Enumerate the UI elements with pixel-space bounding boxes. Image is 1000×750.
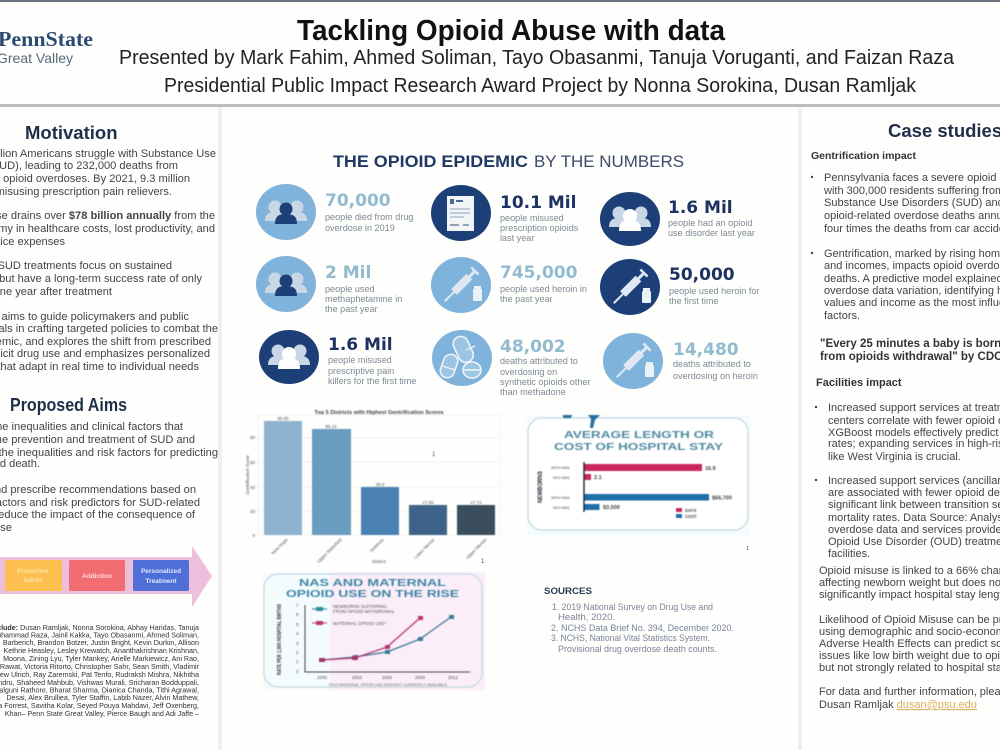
text block: team acknowledgement: Khan– Penn State Great Valley, Pierce Baugh and Adi Jaffe –: [5, 710, 199, 718]
x ticks: 2009: [415, 675, 426, 680]
axis labels: Upper Makefield: [316, 537, 343, 564]
y ticks: 1: [296, 659, 299, 664]
legend: FROM OPIOID WITHDRAWAL: [333, 609, 395, 614]
x ticks: [317, 675, 459, 680]
x ticks: 2000: [317, 675, 328, 680]
stat: 10.1 Mil: people misused: [500, 213, 564, 223]
chart title: OPIOID USE ON THE RISE: [286, 589, 459, 600]
y ticks: 3: [296, 641, 299, 646]
text block: opioid misuse: affecting newborn weight but does not: [819, 577, 1000, 589]
chart title: [286, 578, 459, 600]
stat: 50,000: 50,000: [669, 265, 735, 285]
bar values: 17.72: [470, 500, 482, 505]
icon: syringe: [603, 333, 663, 389]
stat: 2 Mil: the past year: [325, 304, 378, 314]
series: maternal: [319, 616, 423, 662]
chart title: [554, 430, 723, 453]
sources: 2. NCHS Data Brief No. 394, December 2020.: [551, 623, 734, 634]
logo: Penn State Great Valley: PennState: [0, 27, 93, 51]
stat: 70,000: 70,000: [325, 191, 391, 211]
bar chart: top 5 districts: Top 5 Districts with Highest Gentrification Scores: [314, 410, 444, 416]
stat: 48,002: overdosing on: [500, 367, 557, 377]
axis labels: 0: [252, 533, 255, 538]
icon: people: [256, 184, 316, 240]
x ticks: 2012: [448, 675, 459, 680]
stat: 1.6 Mil first time: people misused: [328, 355, 392, 365]
stat: 50,000: people used heroin for: [669, 286, 760, 296]
title: Tackling Opioid Abuse with data: [297, 15, 726, 47]
stat: 2 Mil: methaphetamine in: [325, 294, 402, 304]
bullets: gentrification: with 300,000 residents suffering from: [823, 185, 1000, 197]
logo: Penn State Great Valley: [0, 27, 93, 66]
bar values: 95.85: [277, 416, 289, 421]
stat: 1.6 Mil opioid use disorder: use disorder last year: [668, 228, 755, 238]
text block: contact: Dusan Ramljak dusan@psu.edu: [819, 699, 977, 711]
subheading: gentrification impact: Gentrification impact: [811, 150, 917, 162]
bar labels: NEWBORNS: [537, 470, 544, 503]
text block: team acknowledgement: Moona, Zining Lyu, Tyler Mankey, Arielle Markiewicz, Ani Rao,: [3, 655, 199, 663]
stat: 1.6 Mil opioid use disorder: people had an opioid: [668, 218, 752, 228]
box: protective habits: habits: [23, 577, 43, 584]
award line: Presidential Public Impact Research Award Project by Nonna Sorokina, Dusan Ramljak: [164, 75, 917, 97]
stat: 10.1 Mil: prescription opioids: [500, 223, 579, 233]
box: protective habits: Protective: [17, 568, 49, 575]
chart title: AVERAGE LENGTH OR: [564, 430, 715, 441]
axis labels: [245, 435, 488, 564]
bar labels: WITH NAS: [551, 496, 570, 500]
axes: [305, 605, 470, 672]
bullets: facilities: like West Virginia is crucial.: [828, 451, 961, 463]
stat: 2 Mil: [256, 256, 402, 314]
heading: Proposed Aims: Proposed Aims: [10, 394, 127, 415]
stat: 14,480: 14,480: [673, 340, 739, 360]
bullets: gentrification: factors.: [824, 310, 860, 322]
chart: average length or cost of hospital stay: [527, 415, 750, 535]
sources: 3. NCHS, National Vital Statistics System.: [551, 633, 710, 644]
y axis title: RATE PER 1,000 HOSPITAL BIRTHS: [277, 603, 283, 675]
line chart: NAS and maternal opioid use: [263, 572, 485, 690]
stat: 1.6 Mil opioid use disorder: [600, 192, 755, 246]
stat: 48,002: than methadone: [500, 387, 566, 397]
box: personalized treatment: Personalized: [141, 568, 181, 575]
bullets: gentrification: [811, 172, 1000, 322]
legend: NEWBORNS SUFFERING: [333, 604, 387, 609]
text block: likelihood: [819, 614, 1000, 674]
text block: team acknowledgement: Desai, Alex Brulliea, Tyler Staffin, Labib Nazer, Alvin Mathew,: [6, 694, 199, 702]
stat: 745,000: [431, 257, 587, 313]
text block: team acknowledgement: [0, 624, 200, 718]
box: addiction: Addiction: [82, 573, 112, 580]
y ticks: 7: [296, 603, 299, 608]
chart title: NAS AND MATERNAL: [299, 578, 446, 589]
bar labels: [537, 466, 732, 511]
y ticks: 0: [296, 669, 299, 674]
panel: opioid epidemic by the numbers: 1: [746, 546, 749, 552]
stat: 745,000: 745,000: [500, 263, 578, 283]
bar chart: top 5 districts: 1: [432, 452, 436, 458]
stat: 10.1 Mil: last year: [500, 233, 534, 243]
stat: 70,000: overdose in 2019: [325, 223, 395, 233]
stat: 1.6 Mil first time: prescriptive pain: [328, 366, 394, 376]
icon: people: [600, 192, 660, 246]
y ticks: 2: [296, 650, 299, 655]
panel: case studies: [811, 120, 1000, 711]
text block: team acknowledgement: Rawat, Victoria Ritorto, Christopher Sahr, Sean Smith, Vladimir: [0, 663, 200, 671]
callout: CDC quote: [820, 338, 1000, 363]
bar labels: WITH NAS: [551, 466, 570, 470]
axis labels: New Hope: [270, 537, 289, 556]
stat: 14,480: deaths attributed to: [673, 359, 751, 369]
stat: 10.1 Mil: [431, 185, 579, 243]
axis labels: Upper Merion: [465, 537, 488, 560]
axis labels: 40: [250, 485, 255, 490]
legend: [676, 508, 697, 519]
box: protective habits: [5, 560, 62, 591]
icon: people: [259, 330, 319, 384]
bullets: gentrification: deaths. A predictive model explained: [824, 273, 1000, 285]
stat: 48,002: deaths attributed to: [500, 356, 578, 366]
box: personalized treatment: Treatment: [145, 578, 177, 585]
stat: 745,000: people used heroin in: [500, 284, 587, 294]
legend: [312, 604, 395, 626]
y ticks: 4: [296, 631, 299, 636]
stat: 48,002: 48,002: [500, 337, 566, 357]
icon: pills: [432, 330, 492, 386]
stat: 14,480: overdosing on heroin: [673, 371, 758, 381]
stat: 48,002: [432, 330, 590, 397]
text block: team acknowledgement: Barberich, Brandon Botzer, Justin Bright, Kevin Durkin, Allison: [3, 639, 199, 647]
y ticks: 6: [296, 612, 299, 617]
icon: prescription document: [431, 185, 491, 241]
axis labels: 60: [250, 460, 255, 465]
stat: 745,000: the past year: [500, 294, 553, 304]
text block: contact: [819, 686, 1000, 711]
panel: opioid epidemic by the numbers: [245, 152, 760, 690]
legend: COST: [685, 514, 697, 519]
footnote: *2012 MATERNAL OPIOID USE DATA NOT CURRENTLY AVAILABLE: [328, 683, 447, 687]
text block: opioid misuse: [819, 565, 1000, 601]
heading: case studies: Case studies: [888, 120, 1000, 141]
stat: 1.6 Mil first time: [259, 330, 416, 386]
stat: 14,480: [603, 333, 758, 389]
stat: 2 Mil: 2 Mil: [325, 263, 371, 283]
axis labels: District: [372, 559, 387, 564]
sources: [544, 586, 734, 655]
stat: 48,002: synthetic opioids other: [500, 377, 590, 387]
legend: MATERNAL OPIOID USE*: [333, 621, 387, 626]
panel: opioid epidemic by the numbers: 1: [481, 559, 485, 565]
presenters line: Presented by Mark Fahim, Ahmed Soliman, Tayo Obasanmi, Tanuja Voruganti, and Faizan Raza: [119, 47, 955, 69]
legend: DAYS: [685, 508, 696, 513]
chart title: COST OF HOSPITAL STAY: [554, 442, 723, 453]
stat: 10.1 Mil: 10.1 Mil: [500, 193, 576, 213]
y ticks: [296, 603, 299, 674]
heading: by the numbers: BY THE NUMBERS: [534, 152, 684, 171]
icon: syringe: [600, 259, 660, 315]
bar labels: $66,700: [712, 496, 732, 502]
icon: syringe: [431, 257, 491, 313]
stat: 1.6 Mil first time: 1.6 Mil: [328, 335, 393, 355]
bar labels: W/O NAS: [553, 506, 570, 510]
heading: Motivation: Motivation: [25, 122, 118, 143]
y ticks: 5: [296, 622, 299, 627]
stat: 1.6 Mil opioid use disorder: 1.6 Mil: [668, 198, 733, 218]
bar labels: 16.9: [705, 466, 716, 472]
stat: 1.6 Mil first time: killers for the first time: [328, 376, 416, 386]
text block: motivation: [0, 148, 218, 373]
x ticks: 2003: [352, 675, 363, 680]
text block: team acknowledgement: Falguni Rathore, Bharat Sharma, Dianica Chanda, Tithi Agrawal,: [0, 686, 199, 694]
bar values: 39.9: [376, 482, 385, 487]
callout: CDC quote: from opioids withdrawal" by CDC: [820, 351, 1000, 363]
subheading: facilities impact: Facilities impact: [816, 377, 902, 389]
bar labels: 2.1: [594, 475, 602, 481]
text block: proposed aims: [0, 421, 218, 534]
bar values: [277, 416, 482, 505]
axis labels: Lower Merion: [413, 537, 436, 560]
sources: Provisional drug overdose death counts.: [558, 644, 717, 655]
x ticks: 2006: [382, 675, 393, 680]
axis labels: Solebury: [369, 537, 385, 553]
bar values: 89.15: [325, 424, 337, 429]
stat: 2 Mil: people used: [325, 284, 375, 294]
bars: [264, 421, 495, 535]
sources: Health, 2020.: [558, 612, 615, 623]
bar chart: top 5 districts: [245, 410, 500, 564]
box: addiction: [69, 560, 125, 591]
sources: SOURCES: [544, 586, 592, 597]
bar values: 17.85: [422, 500, 434, 505]
axis labels: 20: [250, 509, 255, 514]
stat: 70,000: people died from drug: [325, 212, 413, 222]
icon: people: [256, 256, 316, 312]
arrow: process flow: [0, 546, 212, 607]
bar labels: W/O NAS: [553, 476, 570, 480]
axis labels: Gentrification Score: [245, 455, 250, 495]
bullets: facilities: [815, 402, 1000, 560]
stat: 50,000: [600, 259, 760, 315]
text block: team acknowledgement: Kethrie Heasley, Lesley Krewatch, Ananthakrishnan Krishnan,: [3, 647, 199, 655]
sources: 1. 2019 National Survey on Drug Use and: [552, 602, 713, 613]
panel: left column: [0, 122, 218, 718]
bar labels: $3,500: [603, 505, 620, 511]
bars: [583, 462, 709, 512]
bullets: facilities: facilities.: [828, 548, 870, 560]
bullets: gentrification: Substance Use Disorders (SUD) and: [824, 197, 1000, 209]
stat: 50,000: the first time: [669, 296, 719, 306]
heading: the opioid epidemic: THE OPIOID EPIDEMIC: [333, 152, 528, 171]
series: newborns: [322, 615, 454, 660]
axis labels: 80: [250, 435, 255, 440]
box: personalized treatment: [133, 560, 189, 591]
stat: 70,000: [256, 184, 413, 240]
